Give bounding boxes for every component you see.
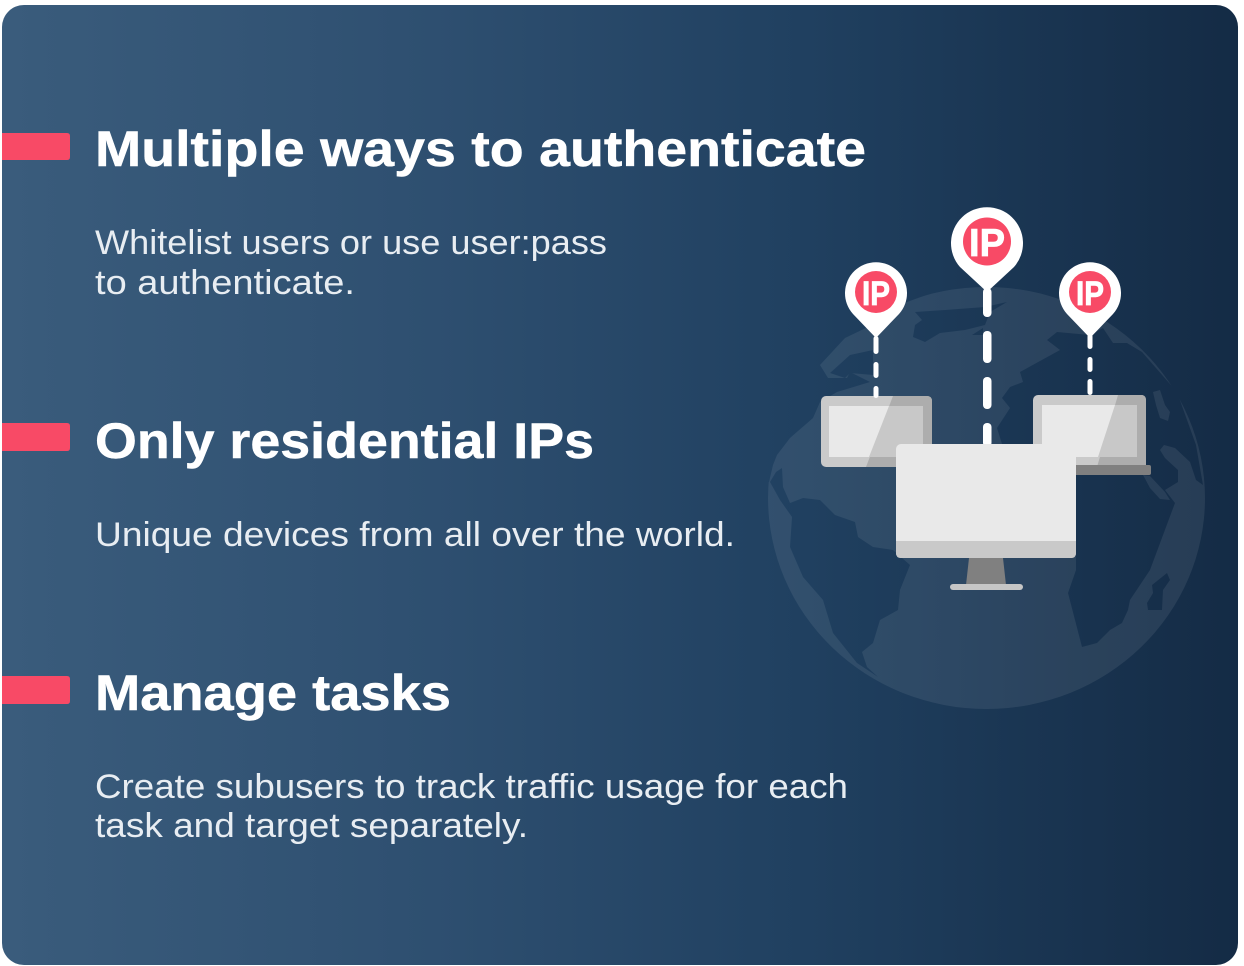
dashed connector: centre bbox=[983, 288, 992, 447]
left laptop bbox=[821, 396, 932, 467]
body text: Create subusers to track traffic usage for each bbox=[95, 768, 848, 806]
IP pin: left: IP bbox=[862, 275, 890, 313]
IP pin: right: IP bbox=[1076, 275, 1104, 313]
IP pin: centre: IP bbox=[969, 222, 1005, 265]
section: multiple ways to authenticate: to authenticate. bbox=[95, 264, 355, 302]
section: multiple ways to authenticate bbox=[2, 121, 866, 302]
IP pin: right bbox=[1059, 262, 1121, 338]
IP pin: left bbox=[845, 262, 907, 338]
monitor bbox=[896, 444, 1076, 590]
illustration: globe with devices and IP pins bbox=[760, 207, 1205, 709]
body text: Whitelist users or use user:pass bbox=[95, 224, 607, 262]
IP pin: centre bbox=[951, 207, 1023, 292]
heading: Multiple ways to authenticate bbox=[95, 121, 866, 177]
right laptop bbox=[1033, 395, 1151, 475]
accent bar bbox=[2, 423, 70, 451]
heading: Manage tasks bbox=[95, 665, 451, 721]
accent bar bbox=[2, 133, 70, 160]
dashed connector: left bbox=[874, 336, 878, 398]
section: manage tasks: task and target separately. bbox=[95, 807, 528, 845]
section: only residential IPs bbox=[2, 413, 735, 554]
dashed connector: right bbox=[1088, 334, 1092, 395]
section: manage tasks bbox=[2, 665, 848, 845]
heading: Only residential IPs bbox=[95, 413, 594, 469]
globe bbox=[760, 270, 1205, 709]
accent bar bbox=[2, 676, 70, 704]
body text: Unique devices from all over the world. bbox=[95, 516, 735, 554]
